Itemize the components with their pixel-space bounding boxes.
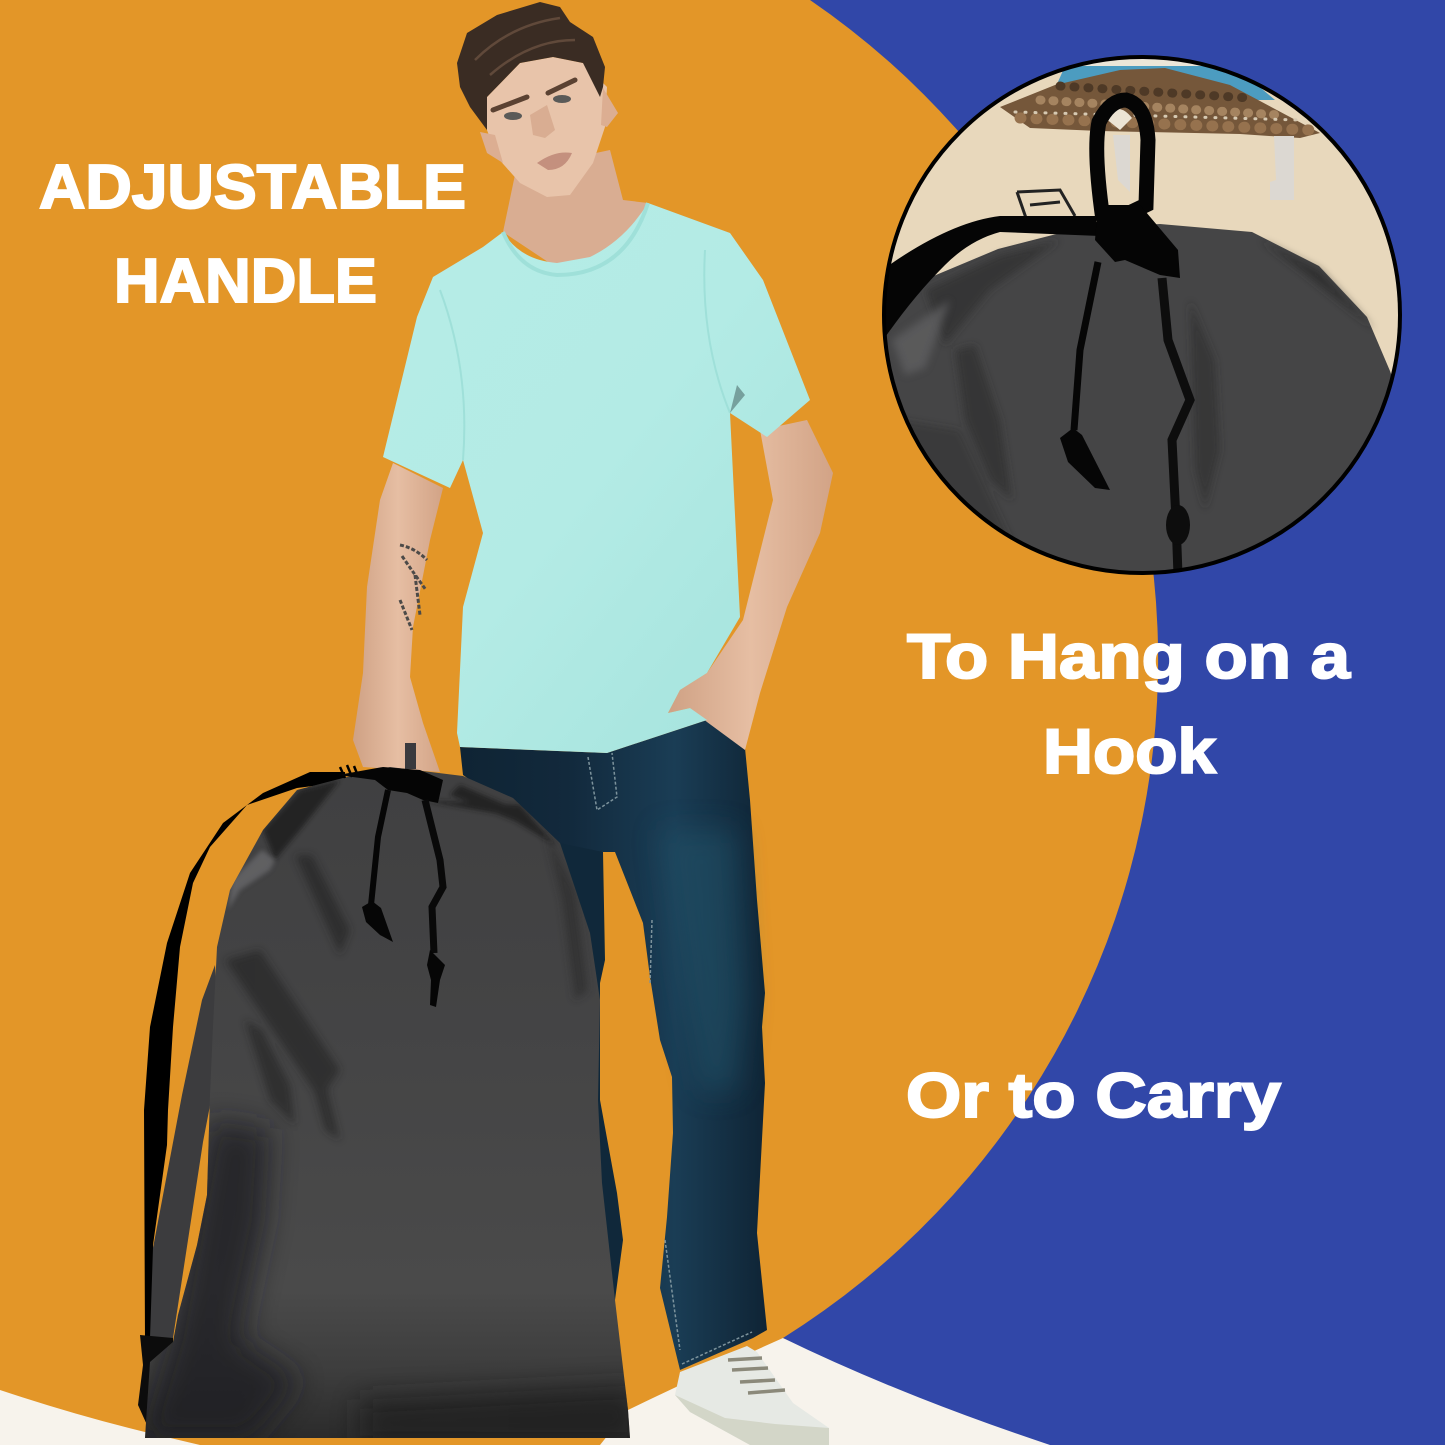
close-up knot left xyxy=(1060,428,1110,490)
close-up cord right xyxy=(1162,278,1190,575)
arm tattoo xyxy=(400,545,427,630)
shelf with shells xyxy=(1000,55,1320,138)
text: or to carry: Or to Carry xyxy=(906,1061,1281,1131)
ears xyxy=(480,88,618,163)
nose and mouth xyxy=(530,105,555,138)
right side crease xyxy=(552,852,588,996)
bag close-up xyxy=(880,224,1400,580)
bag highlight xyxy=(228,850,275,910)
text: to hang on a hook: To Hang on a xyxy=(907,622,1351,692)
close-up gather xyxy=(1095,205,1180,278)
bag body xyxy=(145,767,630,1438)
left arm xyxy=(353,463,443,772)
close-up highlight xyxy=(892,300,950,375)
close-up folds xyxy=(911,238,1374,530)
jeans xyxy=(460,720,767,1370)
background: cream floor curve right xyxy=(600,1338,1060,1445)
bag shading xyxy=(140,780,640,1445)
drawstring fringe xyxy=(340,765,358,778)
heading: adjustable handle xyxy=(39,153,466,316)
jeans stitching xyxy=(588,723,752,1364)
neck xyxy=(503,150,648,268)
jeans highlights xyxy=(660,830,745,1090)
wall hooks xyxy=(1113,135,1294,200)
white sneaker xyxy=(675,1346,829,1445)
drawstring knot right xyxy=(427,950,445,1007)
t-shirt xyxy=(383,203,810,753)
face xyxy=(480,57,618,197)
heading: adjustable handle: ADJUSTABLE xyxy=(39,153,466,222)
laundry bag xyxy=(138,743,640,1445)
close-up cord left xyxy=(1074,262,1098,430)
hanging strap bracket xyxy=(1017,190,1075,218)
background: cream floor curve left xyxy=(0,1390,200,1445)
eyes and brows xyxy=(493,80,575,110)
strap buckle xyxy=(138,1335,173,1436)
heading: adjustable handle: HANDLE xyxy=(114,247,377,316)
drawstring cord right xyxy=(425,800,443,953)
strap gray section xyxy=(150,965,217,1338)
drawstring knot left xyxy=(362,901,393,942)
text: to hang on a hook: Hook xyxy=(1043,717,1217,787)
figure: man standing xyxy=(353,2,833,1445)
shoulder strap xyxy=(138,772,345,1436)
lower left shadow xyxy=(140,1120,300,1440)
text: to hang on a hook xyxy=(907,622,1351,787)
shell xyxy=(1108,109,1132,130)
drawstring cord left xyxy=(371,790,388,905)
close-up knot right xyxy=(1166,505,1190,545)
background: blue curved panel xyxy=(783,0,1445,1445)
back leg xyxy=(520,800,623,1300)
circle border xyxy=(884,57,1400,573)
diagonal folds xyxy=(225,855,350,1140)
panel: hook close-up photo xyxy=(880,55,1400,580)
hair xyxy=(457,2,605,130)
bottom shadow xyxy=(360,1385,640,1445)
bag handle in hand xyxy=(405,743,416,769)
close-up strap xyxy=(886,216,1096,336)
strap black section xyxy=(144,772,345,1342)
right arm xyxy=(668,420,833,750)
close-up hanging loop xyxy=(1097,100,1148,220)
drawstring gather xyxy=(338,767,443,803)
